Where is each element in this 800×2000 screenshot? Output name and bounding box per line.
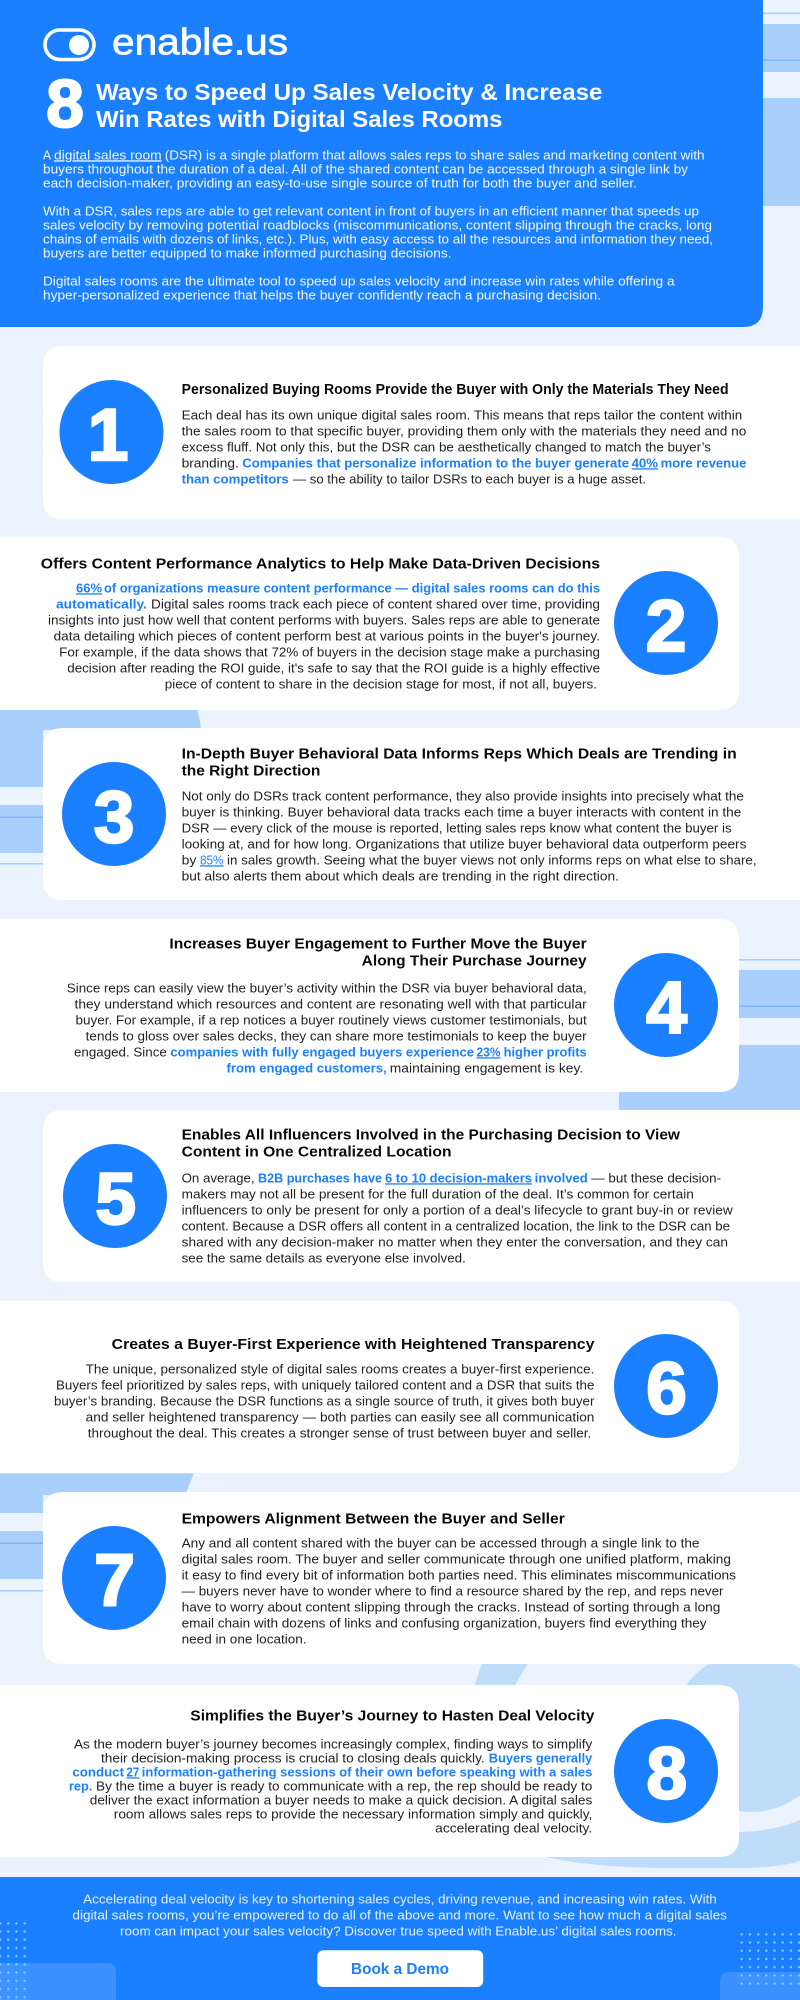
card 5 heading: Content in One Centralized Location bbox=[182, 1145, 452, 1161]
card 8 text bbox=[69, 1736, 593, 1835]
card 8 text: By the time a buyer is ready to communicate with a rep, the rep should be ready to bbox=[96, 1778, 592, 1793]
card 4 text: tends to gloss over sales decks, they can share more testimonials to keep the buyer bbox=[86, 1028, 587, 1043]
card 3 heading: the Right Direction bbox=[182, 764, 320, 780]
number badge 3 bbox=[62, 762, 166, 866]
intro text: each decision-maker, providing an easy-to-use single source of truth for both the buyer and seller. bbox=[43, 175, 637, 190]
intro text bbox=[43, 147, 713, 302]
card 1 text: branding. bbox=[182, 455, 239, 470]
footer decoration: right dots and block bbox=[720, 1930, 800, 2000]
card 2 text: decision after reading the ROI guide, it's safe to say that the ROI guide is a highly effective bbox=[67, 660, 600, 675]
card 5 text: On average, bbox=[182, 1170, 255, 1185]
card 8 text: their decision-making process is crucial to closing deals quickly. bbox=[101, 1750, 485, 1765]
card 6 text: buyer’s branding. Because the DSR functions as a single source of truth, it gives both buyer bbox=[54, 1393, 595, 1408]
card 3 text: in sales growth. Seeing what the buyer views not only informs reps on what else to share, bbox=[227, 852, 757, 867]
number badge 4: 4 bbox=[646, 968, 687, 1049]
panel: card 3 bbox=[43, 728, 800, 900]
card 5 text: — but these decision- bbox=[591, 1170, 721, 1185]
footer text: room can impact your sales velocity? Discover true speed with Enable.us’ digital sales rooms. bbox=[120, 1923, 676, 1938]
card 2 text: 66% bbox=[76, 580, 102, 595]
panel: card 5 bbox=[43, 1110, 800, 1282]
card 8 text: 27 bbox=[126, 1764, 139, 1779]
logo wordmark: enable.us bbox=[112, 21, 288, 62]
card 4 heading: Along Their Purchase Journey bbox=[362, 954, 587, 970]
card 7 text: it easy to find every bit of information both parties need. This eliminates miscommunications bbox=[182, 1567, 737, 1582]
card 2 text bbox=[48, 580, 600, 691]
card 4 text: maintaining engagement is key. bbox=[390, 1060, 583, 1075]
panel: card 8 bbox=[0, 1685, 739, 1857]
card 7 text: need in one location. bbox=[182, 1631, 307, 1646]
intro text: hyper-personalized experience that helps the buyer confidently reach a purchasing decision. bbox=[43, 287, 601, 302]
intro text: (DSR) is a single platform that allows sales reps to share sales and marketing content with bbox=[165, 147, 705, 162]
number badge 5: 5 bbox=[95, 1159, 136, 1240]
card 2 text: insights into just how well that content performs with buyers. Sales reps are able to generate bbox=[48, 612, 600, 627]
card 4 heading bbox=[169, 937, 587, 970]
card 1 text: 40% bbox=[632, 455, 658, 470]
card 7 text: email chain with dozens of links and confusing organization, buyers find everything they bbox=[182, 1615, 707, 1630]
intro text: With a DSR, sales reps are able to get relevant content in front of buyers in an efficient manner that speeds up bbox=[43, 203, 699, 218]
number badge 5 bbox=[63, 1144, 167, 1248]
card 7 text: have to worry about content slipping through the cracks. Instead of sorting through a long bbox=[182, 1599, 720, 1614]
card 2 heading: Offers Content Performance Analytics to Help Make Data-Driven Decisions bbox=[41, 557, 600, 573]
title: Ways to Speed Up Sales Velocity & Increase bbox=[96, 79, 602, 105]
intro text: buyers are better equipped to make informed purchasing decisions. bbox=[43, 245, 452, 260]
title bbox=[96, 79, 602, 132]
card 3 text: 85% bbox=[200, 852, 224, 867]
footer text: Accelerating deal velocity is key to shortening sales cycles, driving revenue, and increasing win rates. With bbox=[83, 1891, 717, 1906]
card 4 text: companies with fully engaged buyers experience bbox=[170, 1044, 474, 1059]
panel: card 7 bbox=[43, 1492, 800, 1664]
card 1 text: excess fluff. Not only this, but the DSR can be aesthetically changed to match the buyer’s bbox=[182, 439, 712, 454]
card 4 text: higher profits bbox=[504, 1044, 587, 1059]
card 3 heading: In-Depth Buyer Behavioral Data Informs Reps Which Deals are Trending in bbox=[182, 747, 737, 763]
card 8 text: conduct bbox=[72, 1764, 125, 1779]
card 2 text: piece of content to share in the decision stage for most, if not all, buyers. bbox=[165, 676, 597, 691]
card 4 text: they understand which resources and content are resonating well with that particular bbox=[74, 996, 587, 1011]
footer panel bbox=[0, 1877, 800, 2000]
card 8 text: information-gathering sessions of their own before speaking with a sales bbox=[142, 1764, 592, 1779]
card 2 text: of organizations measure content performance — digital sales rooms can do this bbox=[104, 580, 600, 595]
number badge 6 bbox=[614, 1334, 718, 1438]
card 1 text bbox=[182, 407, 746, 486]
intro text: buyers throughout the duration of a deal. All of the shared content can be accessed through a single link by bbox=[43, 161, 689, 176]
card 7 heading: Empowers Alignment Between the Buyer and Seller bbox=[182, 1512, 565, 1528]
card 6 text: Buyers feel prioritized by sales reps, with uniquely tailored content and a DSR that suits the bbox=[56, 1377, 594, 1392]
card 4 text: 23% bbox=[476, 1044, 501, 1059]
card 5 text: content. Because a DSR offers all content in a centralized location, the link to the DSR can be bbox=[182, 1218, 730, 1233]
number badge 8: 8 bbox=[646, 1734, 687, 1814]
footer text bbox=[72, 1891, 728, 1938]
card 1 text: Companies that personalize information to the buyer generate bbox=[242, 455, 629, 470]
card 7 text bbox=[182, 1535, 737, 1646]
card 5 heading: Enables All Influencers Involved in the Purchasing Decision to View bbox=[182, 1128, 681, 1144]
card 2 text: data detailing which pieces of content perform best at various points in the buyer's journey. bbox=[54, 628, 600, 643]
number badge 2 bbox=[614, 571, 718, 675]
card 8 text: accelerating deal velocity. bbox=[435, 1820, 592, 1835]
card 8 heading: Simplifies the Buyer’s Journey to Hasten Deal Velocity bbox=[190, 1709, 594, 1725]
card 6 text bbox=[54, 1361, 595, 1440]
card 4 text: engaged. Since bbox=[74, 1044, 167, 1059]
card 7 text: digital sales room. The buyer and seller communicate through one unified platform, making bbox=[182, 1551, 731, 1566]
number badge 6: 6 bbox=[646, 1348, 687, 1430]
intro text: digital sales room bbox=[54, 147, 162, 162]
number badge 7: 7 bbox=[94, 1540, 135, 1621]
panel: card 6 bbox=[0, 1301, 739, 1473]
card 5 text: shared with any decision-maker no matter when they enter the conversation, and they can bbox=[182, 1234, 728, 1249]
number badge 1: 1 bbox=[88, 395, 128, 476]
card 5 text: makers may not all be present for the full duration of the deal. It’s common for certain bbox=[182, 1186, 694, 1201]
card 2 text: Digital sales rooms track each piece of content shared over time, providing bbox=[151, 596, 600, 611]
button: book a demo bbox=[317, 1950, 483, 1987]
card 7 text: Any and all content shared with the buyer can be accessed through a single link to the bbox=[182, 1535, 700, 1550]
card 7 text: — buyers never have to wonder where to find a resource shared by the rep, and reps never bbox=[182, 1583, 724, 1598]
card 6 text: throughout the deal. This creates a stronger sense of trust between buyer and seller. bbox=[88, 1425, 591, 1440]
number badge 4 bbox=[614, 953, 718, 1057]
intro text: chains of emails with dozens of links, etc.). Plus, with easy access to all the resources and information they need, bbox=[43, 231, 713, 246]
card 3 text: by bbox=[182, 852, 197, 867]
card 3 text bbox=[182, 788, 757, 883]
card 1 text: Each deal has its own unique digital sales room. This means that reps tailor the content within bbox=[182, 407, 742, 422]
number badge 2: 2 bbox=[646, 586, 686, 667]
card 5 heading bbox=[182, 1128, 681, 1161]
card 4 text: Since reps can easily view the buyer’s activity within the DSR via buyer behavioral data, bbox=[67, 980, 587, 995]
card 3 text: but also alerts them about which deals are trending in the right direction. bbox=[182, 868, 619, 883]
footer text: digital sales rooms, you’re empowered to do all of the above and more. Want to see how much a digital sales bbox=[72, 1907, 728, 1922]
number badge 3: 3 bbox=[94, 777, 134, 858]
panel: card 1 bbox=[43, 346, 800, 519]
card 6 heading: Creates a Buyer-First Experience with Heightened Transparency bbox=[112, 1337, 594, 1353]
card 1 text: — so the ability to tailor DSRs to each buyer is a huge asset. bbox=[293, 471, 646, 486]
intro text: A bbox=[43, 147, 51, 162]
card 3 text: Not only do DSRs track content performance, they also provide insights into precisely what the bbox=[182, 788, 744, 803]
card 8 text: As the modern buyer’s journey becomes increasingly complex, finding ways to simplify bbox=[74, 1736, 593, 1751]
card 5 text: involved bbox=[535, 1170, 588, 1185]
card 5 text bbox=[182, 1170, 733, 1265]
card 3 text: looking at, and for how long. Organizations that utilize buyer behavioral data outperform peers bbox=[182, 836, 747, 851]
header panel bbox=[0, 0, 763, 327]
card 1 heading: Personalized Buying Rooms Provide the Buyer with Only the Materials They Need bbox=[182, 382, 729, 398]
card 1 text: the sales room to that specific buyer, providing them only with the materials they need and no bbox=[182, 423, 746, 438]
title numeral 8: 8 bbox=[46, 66, 84, 142]
number badge 1 bbox=[60, 380, 164, 484]
intro text: Digital sales rooms are the ultimate tool to speed up sales velocity and increase win rates while offering a bbox=[43, 273, 675, 288]
card 6 text: and seller heightened transparency — both parties can easily see all communication bbox=[86, 1409, 594, 1424]
panel: card 4 bbox=[0, 919, 739, 1092]
number badge 8 bbox=[614, 1719, 718, 1823]
card 8 text: rep. bbox=[69, 1778, 92, 1793]
card 3 text: DSR — every click of the mouse is reported, letting sales reps know what content the buyer is bbox=[182, 820, 732, 835]
card 4 text: buyer. For example, if a rep notices a buyer routinely views customer testimonials, but bbox=[76, 1012, 587, 1027]
card 6 text: The unique, personalized style of digital sales rooms creates a buyer-first experience. bbox=[86, 1361, 594, 1376]
icon: toggle logo bbox=[45, 30, 94, 60]
card 4 text: from engaged customers, bbox=[226, 1060, 387, 1075]
card 2 text: For example, if the data shows that 72% of buyers in the decision stage make a purchasing bbox=[59, 644, 600, 659]
button: book a demo: Book a Demo bbox=[351, 1961, 449, 1978]
footer decoration: left dots and block bbox=[0, 1919, 116, 2000]
card 3 text: buyer is thinking. Buyer behavioral data tracks each time a buyer interacts with content in the bbox=[182, 804, 741, 819]
card 3 heading bbox=[182, 747, 737, 780]
card 5 text: see the same details as everyone else involved. bbox=[182, 1250, 466, 1265]
card 5 text: 6 to 10 decision-makers bbox=[385, 1170, 532, 1185]
card 2 text: automatically. bbox=[56, 596, 147, 611]
card 5 text: B2B purchases have bbox=[258, 1170, 382, 1185]
card 8 text: room allows sales reps to provide the necessary information simply and quickly, bbox=[114, 1806, 592, 1821]
card 1 text: more revenue bbox=[661, 455, 746, 470]
panel: card 2 bbox=[0, 537, 739, 710]
card 8 text: deliver the exact information a buyer needs to make a quick decision. A digital sales bbox=[90, 1792, 593, 1807]
card 1 text: than competitors bbox=[182, 471, 289, 486]
card 8 text: Buyers generally bbox=[489, 1750, 593, 1765]
intro text: sales velocity by removing potential roadblocks (miscommunications, content slipping through the cracks, long bbox=[43, 217, 712, 232]
title: Win Rates with Digital Sales Rooms bbox=[96, 106, 502, 132]
card 4 text bbox=[67, 980, 587, 1075]
card 5 text: influencers to only be present for only a portion of a deal’s lifecycle to grant buy-in or review bbox=[182, 1202, 733, 1217]
card 4 heading: Increases Buyer Engagement to Further Move the Buyer bbox=[169, 937, 587, 953]
number badge 7 bbox=[62, 1526, 166, 1630]
